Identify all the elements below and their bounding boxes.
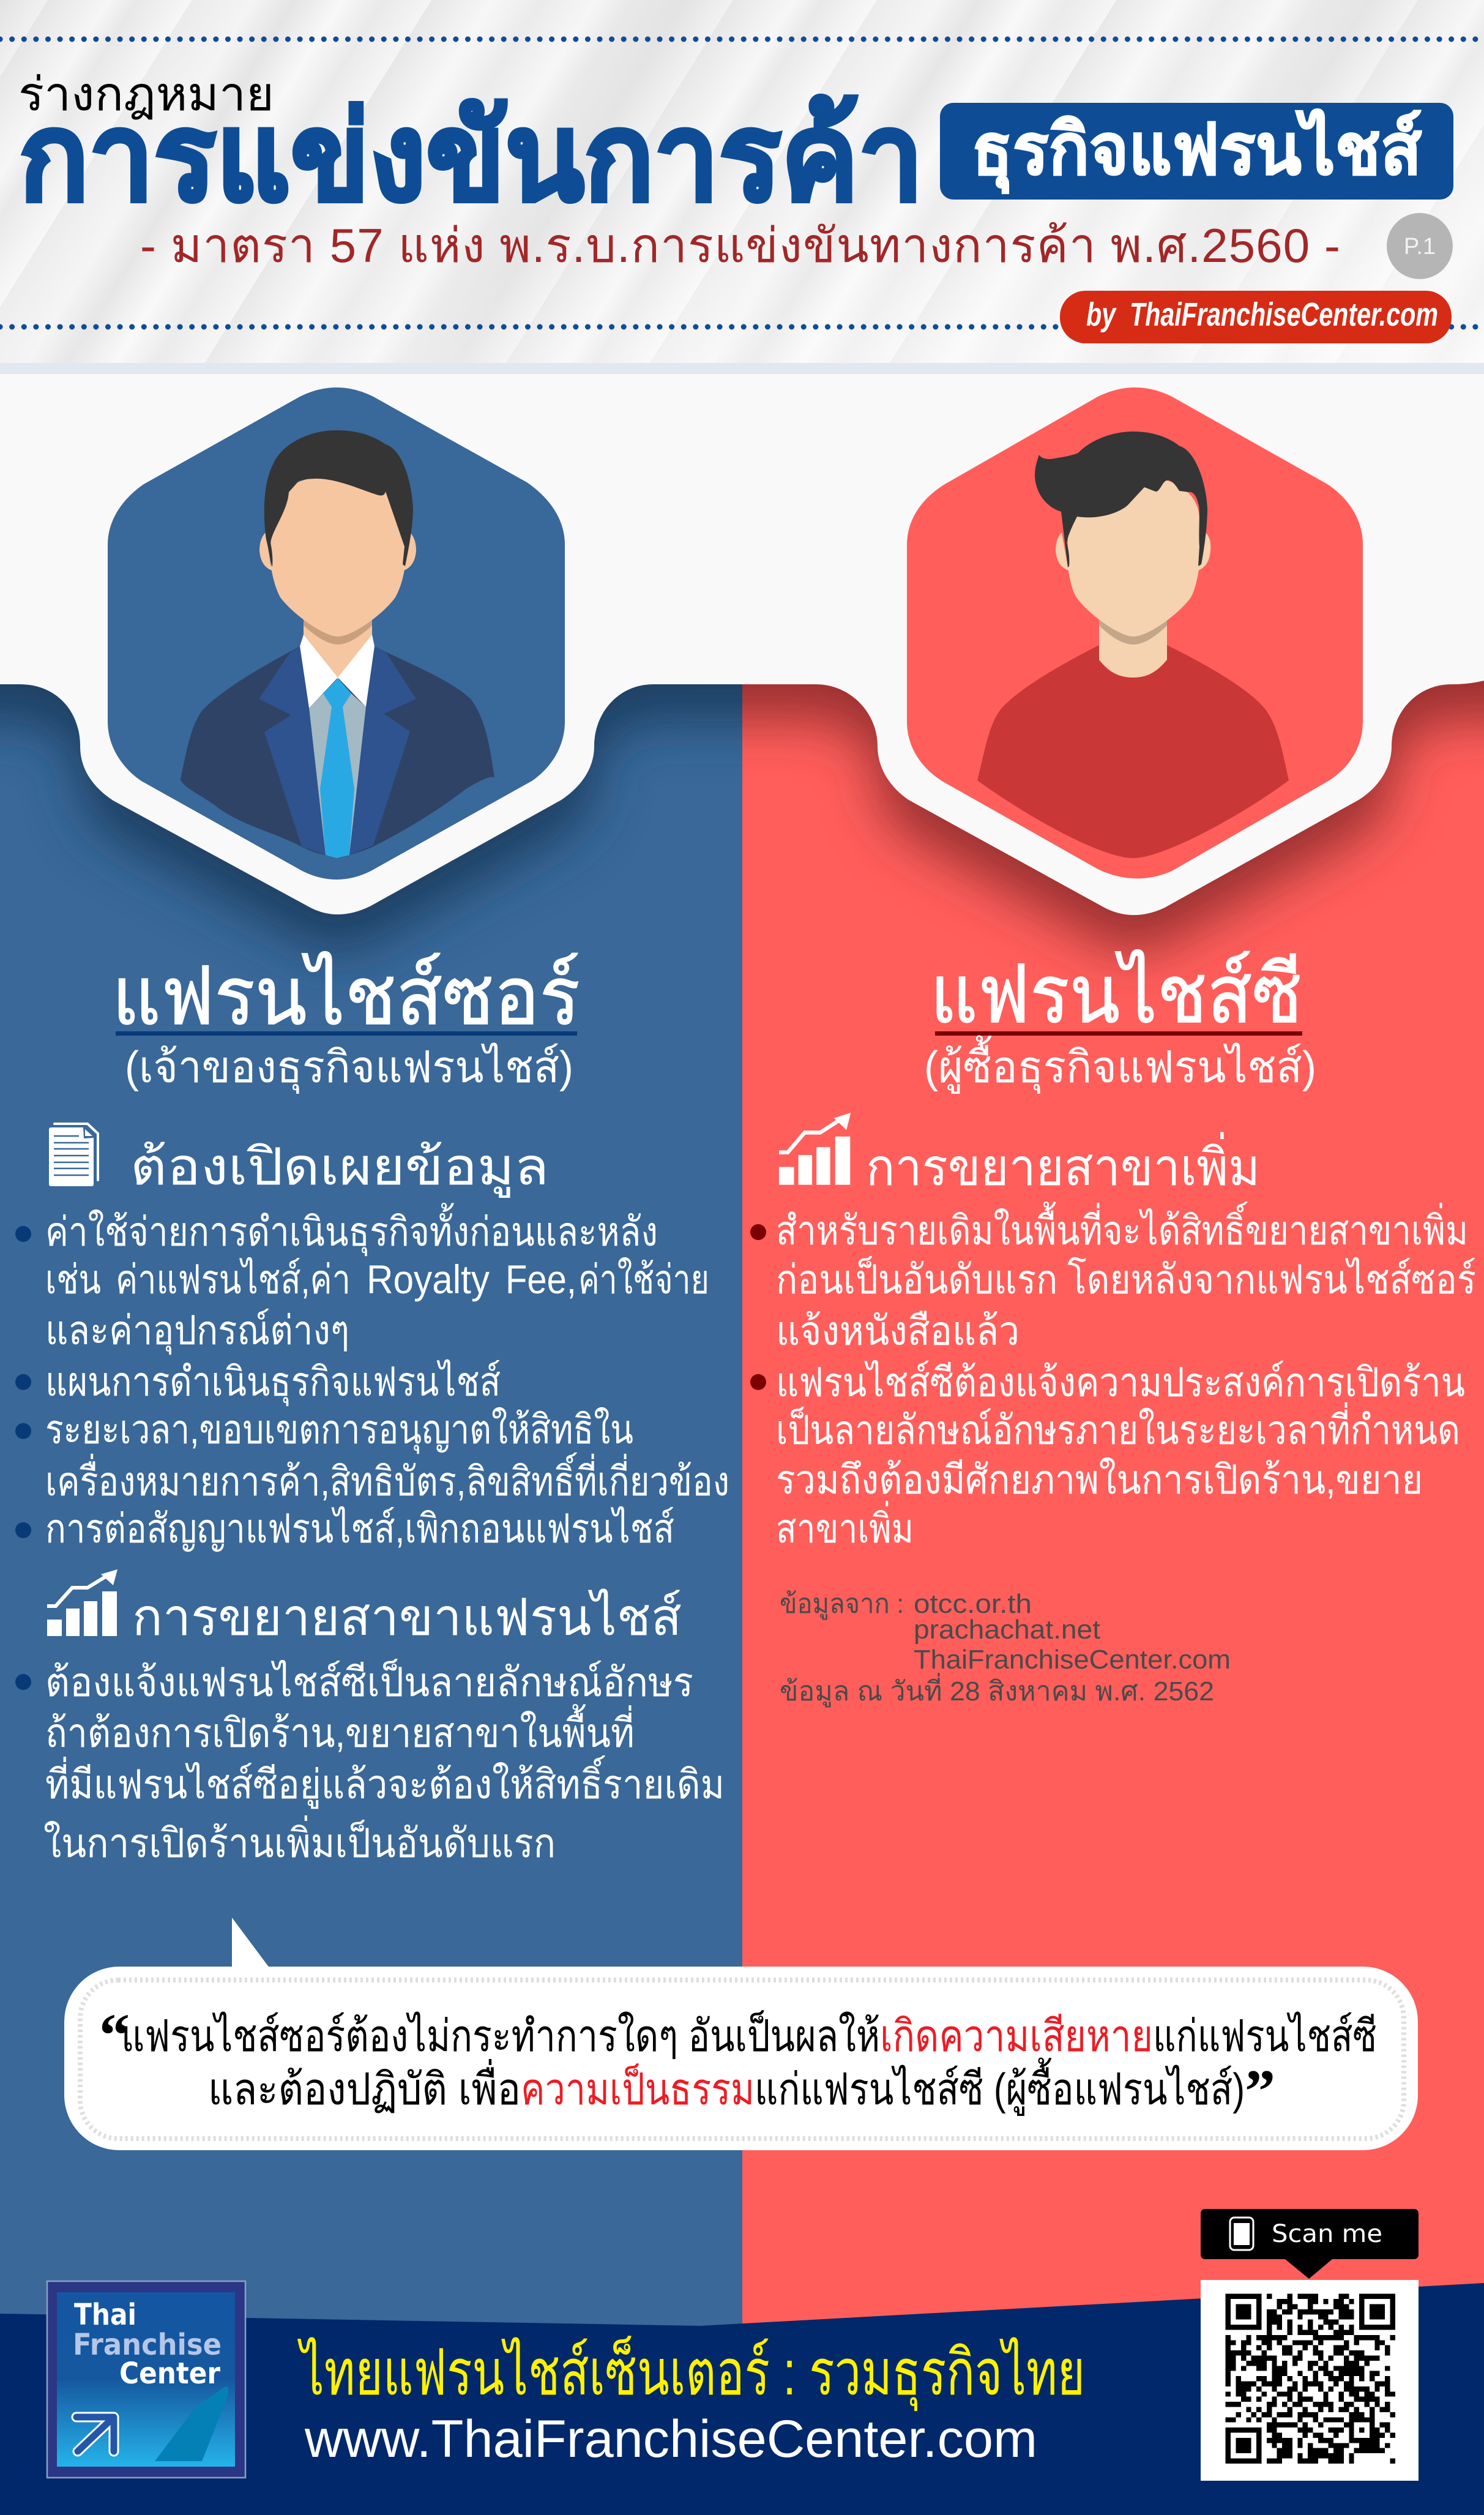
- icon: growth chart left: [47, 1569, 117, 1636]
- footer band: [0, 2283, 1484, 2515]
- section heading: additional branches: การขยายสาขาเพิ่ม: [866, 1132, 1260, 1196]
- collar: [300, 635, 375, 708]
- icon: growth chart right: [779, 1113, 851, 1185]
- source credits: otcc.or.th: [914, 1589, 1032, 1619]
- header section: [0, 0, 1484, 374]
- icon: document: [49, 1124, 98, 1186]
- bullet list: disclosure: ระยะเวลา,ขอบเขตการอนุญาตให้สิทธิใน: [45, 1407, 633, 1454]
- logo: Thai Franchise Center: Center: [119, 2356, 220, 2391]
- title small line: ร่างกฎหมาย: [18, 69, 274, 121]
- logo: Thai Franchise Center: Franchise: [73, 2328, 222, 2362]
- shirt: [309, 693, 366, 855]
- speech bubble: “: [99, 2001, 130, 2069]
- heading: franchisor: แฟรนไชส์ซอร์: [112, 951, 580, 1041]
- QR code: [1201, 2280, 1419, 2481]
- source credits: ข้อมูล ณ วันที่ 28 สิงหาคม พ.ศ. 2562: [780, 1672, 1214, 1708]
- logo: Thai Franchise Center: [47, 2281, 245, 2478]
- bullet list: branch expansion: ที่มีแฟรนไชส์ซีอยู่แล้วจะต้องให้สิทธิ์รายเดิม: [45, 1755, 725, 1809]
- hexagon: [108, 387, 565, 880]
- lapel left: [259, 646, 326, 855]
- header base band: [0, 363, 1484, 374]
- speech bubble: และต้องปฏิบัติ เพื่อ: [208, 2059, 521, 2114]
- left notch cut-out: [0, 374, 742, 914]
- subtitle: - มาตรา 57 แห่ง พ.ร.บ.การแข่งขันทางการค้า พ.ศ.2560 -: [140, 219, 1340, 272]
- heading: franchisee: [924, 949, 1316, 1094]
- neck: [304, 618, 372, 679]
- bullet list: disclosure: เครื่องหมายการค้า,สิทธิบัตร,ลิขสิทธิ์ที่เกี่ยวข้อง: [45, 1452, 729, 1504]
- page badge: P.1: [1404, 234, 1436, 260]
- bullet list: franchisee: แจ้งหนังสือแล้ว: [776, 1308, 1020, 1353]
- neck: [1099, 618, 1167, 678]
- scan me label: [1201, 2209, 1419, 2279]
- speech bubble: ความเป็นธรรม: [521, 2063, 755, 2114]
- hexagon: [907, 387, 1363, 878]
- logo: Thai Franchise Center: Thai: [74, 2298, 136, 2332]
- footer website: www.ThaiFranchiseCenter.com: [304, 2410, 1037, 2468]
- bullet list: branch expansion: [15, 1658, 725, 1866]
- icon: franchisee hexagon portrait: [907, 387, 1363, 878]
- bullet list: disclosure: ค่าแฟรนไชส์,ค่า: [116, 1257, 351, 1302]
- bullet list: disclosure: ค่าใช้จ่าย: [578, 1257, 709, 1302]
- bullet list: franchisee: รวมถึงต้องมีศักยภาพในการเปิดร้าน,ขยาย: [776, 1457, 1423, 1502]
- icon: franchisor hexagon portrait: [108, 387, 565, 880]
- bullet list: disclosure: เช่น: [45, 1257, 101, 1302]
- shirt: [977, 645, 1289, 858]
- bullet list: franchisee: [750, 1201, 1476, 1551]
- heading: franchisee: แฟรนไชส์ซี: [930, 949, 1302, 1039]
- bullet list: disclosure: Royalty: [367, 1257, 490, 1302]
- source credits: [780, 1589, 1231, 1708]
- section heading: branch expansion: การขยายสาขาแฟรนไชส์: [132, 1588, 682, 1646]
- badge: franchise business: ธุรกิจแฟรนไชส์: [972, 109, 1422, 193]
- speech bubble: แฟรนไชส์ซอร์ต้องไม่กระทำการใดๆ อันเป็นผลให้: [121, 2010, 880, 2061]
- heading: franchisee: (ผู้ซื้อธุรกิจแฟรนไชส์): [924, 1035, 1316, 1094]
- right notch cut-out: [742, 374, 1484, 915]
- top dotted line: [0, 37, 1484, 42]
- section heading: disclosure: ต้องเปิดเผยข้อมูล: [130, 1138, 549, 1198]
- header streak fade: [0, 0, 1484, 363]
- footer tagline: ไทยแฟรนไชส์เซ็นเตอร์ : รวมธุรกิจไทย: [297, 2335, 1085, 2412]
- bullet list: disclosure: Fee,: [505, 1257, 576, 1302]
- speech bubble: ”: [1245, 2057, 1275, 2125]
- neck shadow: [1099, 618, 1167, 645]
- scan me label: Scan me: [1272, 2220, 1382, 2248]
- bullet list: branch expansion: ถ้าต้องการเปิดร้าน,ขยายสาขาในพื้นที่: [45, 1704, 635, 1755]
- shadow under left notch: [0, 684, 742, 973]
- bullet list: disclosure: และค่าอุปกรณ์ต่างๆ: [45, 1307, 349, 1355]
- header streak background: [0, 0, 1484, 363]
- source credits: prachachat.net: [914, 1615, 1100, 1645]
- byline pill: [1060, 291, 1452, 343]
- source credits: ข้อมูลจาก :: [780, 1589, 904, 1620]
- bullet list: disclosure: การต่อสัญญาแฟรนไชส์,เพิกถอนแฟรนไชส์: [45, 1506, 674, 1552]
- bullet list: branch expansion: ในการเปิดร้านเพิ่มเป็นอันดับแรก: [43, 1815, 556, 1866]
- bullet list: disclosure: แผนการดำเนินธุรกิจแฟรนไชส์: [45, 1359, 501, 1407]
- speech bubble: แก่แฟรนไชส์ซี: [1153, 2011, 1377, 2061]
- page badge: [1387, 213, 1453, 279]
- main title: การแข่งขันการค้า: [19, 89, 923, 226]
- speech bubble: เกิดความเสียหาย: [880, 2012, 1153, 2061]
- shadow under right notch: [742, 681, 1484, 982]
- heading: franchisor: (เจ้าของธุรกิจแฟรนไชส์): [125, 1042, 573, 1094]
- hair: [1035, 432, 1207, 567]
- neck shadow: [304, 618, 372, 645]
- bullet list: disclosure: ค่าใช้จ่ายการดำเนินธุรกิจทั้งก่อนและหลัง: [45, 1203, 658, 1257]
- speech bubble: แก่แฟรนไชส์ซี (ผู้ซื้อแฟรนไชส์): [755, 2057, 1245, 2116]
- lapel right: [349, 646, 416, 855]
- face: [270, 474, 405, 637]
- bullet list: disclosure: [15, 1203, 729, 1552]
- ears: [1056, 533, 1210, 570]
- heading: franchisor: [112, 951, 580, 1094]
- panel: franchisee (red): [742, 681, 1484, 2515]
- source credits: ThaiFranchiseCenter.com: [914, 1645, 1231, 1675]
- bullet list: franchisee: สาขาเพิ่ม: [776, 1501, 914, 1551]
- tie: [320, 678, 354, 858]
- hair: [264, 430, 413, 566]
- panel: franchisor (blue): [0, 684, 742, 2515]
- bullet list: branch expansion: ต้องแจ้งแฟรนไชส์ซีเป็นลายลักษณ์อักษร: [45, 1658, 693, 1705]
- bottom dotted line: [0, 324, 1484, 329]
- jacket: [181, 646, 494, 858]
- face: [1068, 474, 1199, 637]
- ears: [259, 533, 416, 570]
- speech bubble: [64, 1918, 1418, 2150]
